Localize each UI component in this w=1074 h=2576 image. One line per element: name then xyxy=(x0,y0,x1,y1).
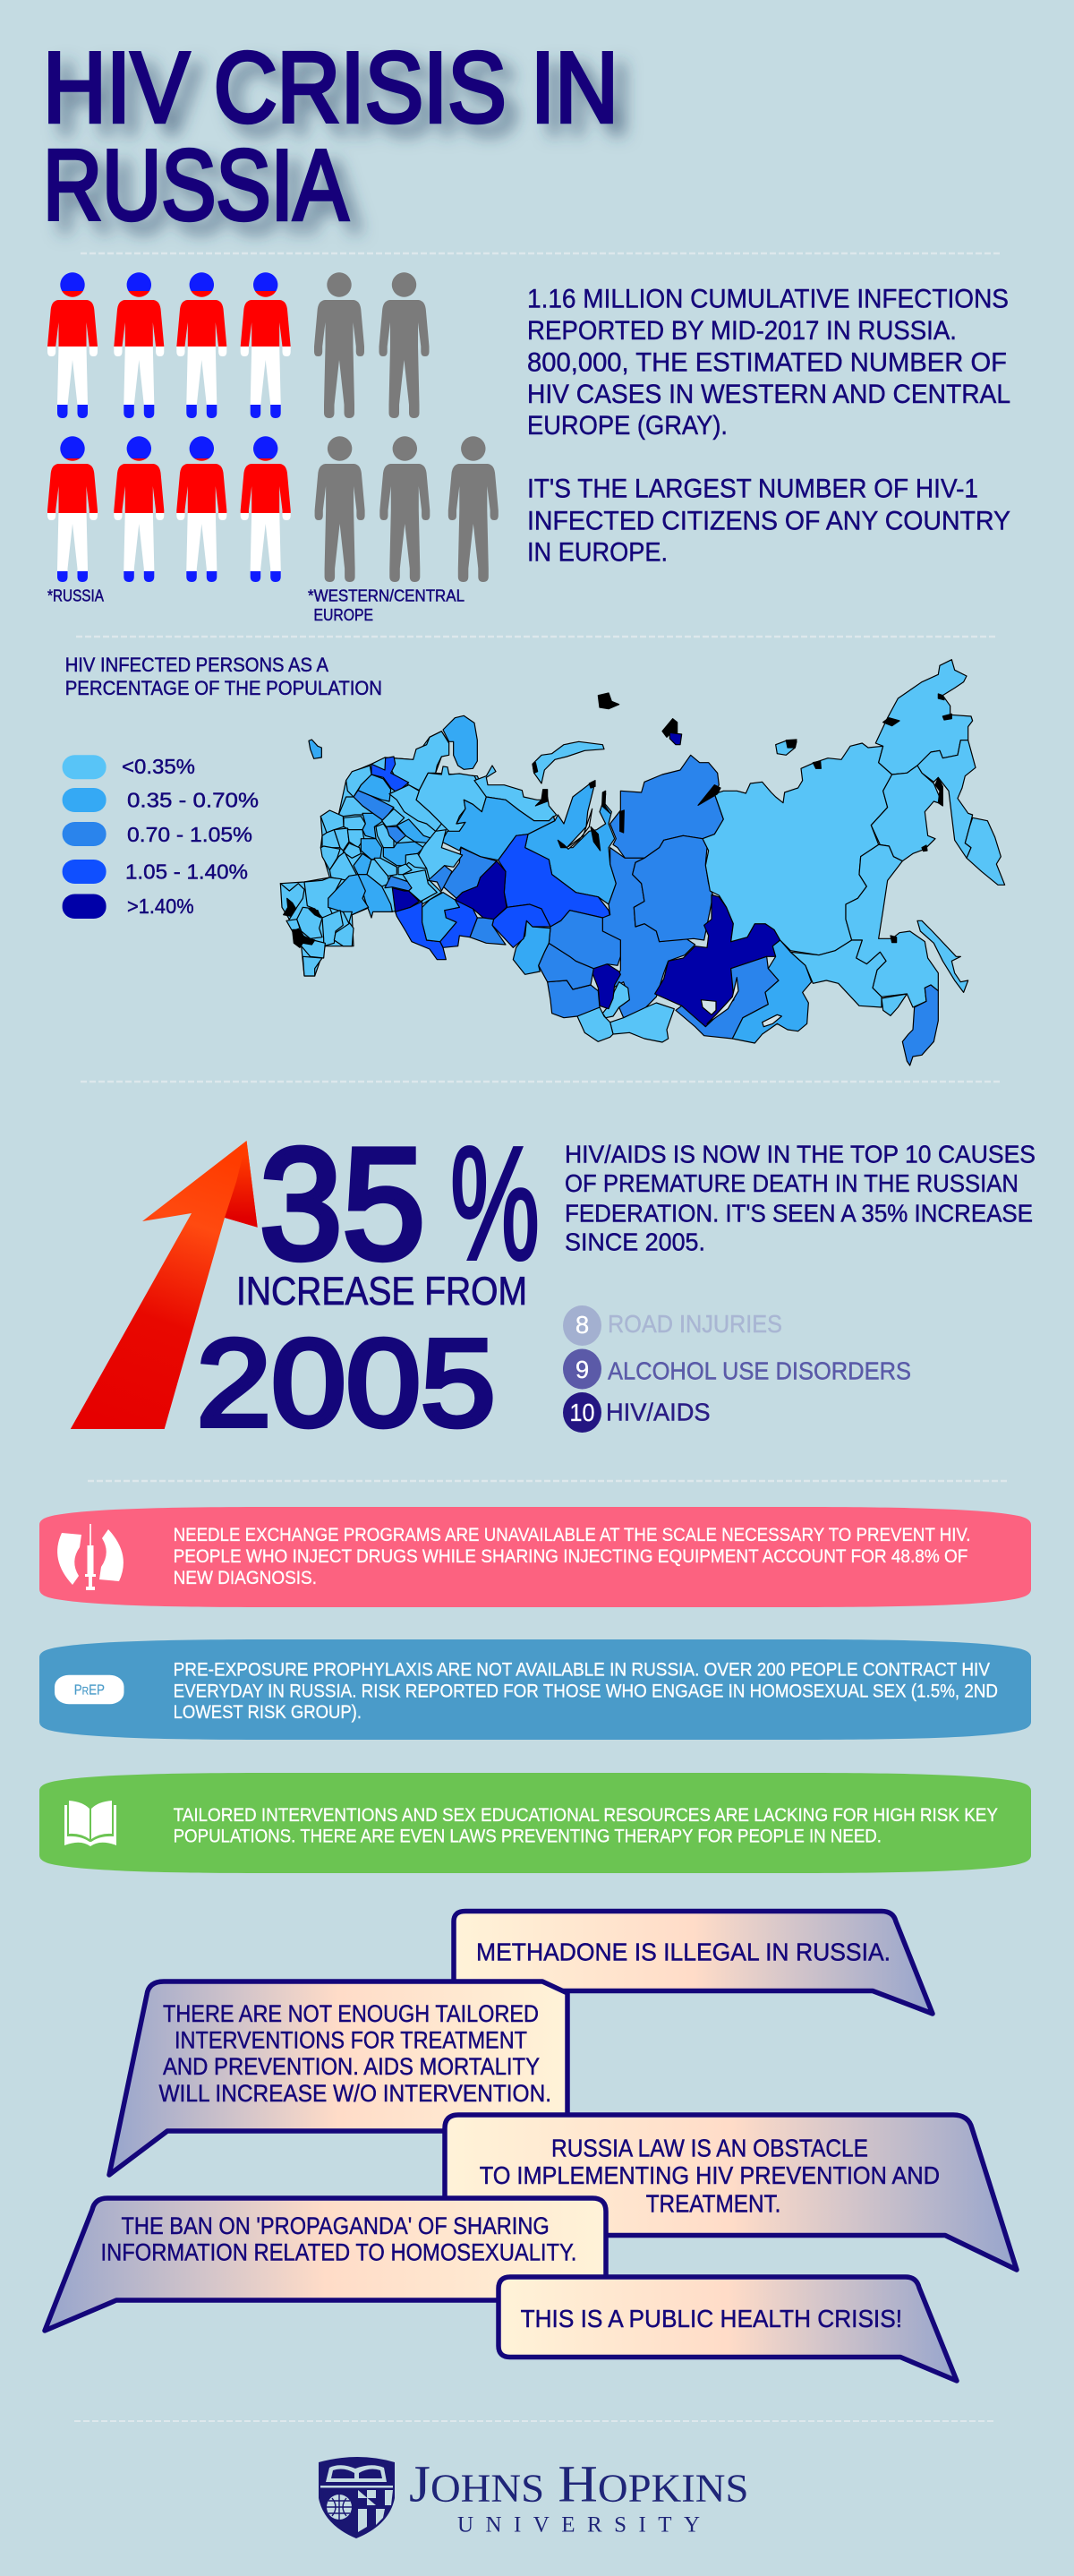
text block: infection statistics: 1.16 MILLION CUMULATIVE INFECTIONS xyxy=(527,284,1009,313)
speech bubble: Russian law: RUSSIA LAW IS AN OBSTACLE xyxy=(551,2134,868,2161)
ranking list: causes 8 to 10: 10 xyxy=(569,1399,594,1426)
text block: premature death ranking: FEDERATION. IT'S SEEN A 35% INCREASE xyxy=(565,1199,1033,1227)
icon: university shield xyxy=(319,2457,395,2538)
title: HIV CRISIS IN xyxy=(43,32,618,143)
map legend: 0.70 - 1.05% xyxy=(127,823,252,846)
text block: premature death ranking xyxy=(565,1140,1036,1256)
speech bubble: public health crisis: THIS IS A PUBLIC HEALTH CRISIS! xyxy=(521,2305,902,2332)
ranking list: causes 8 to 10: 8 xyxy=(575,1311,589,1339)
text block: infection statistics: IT'S THE LARGEST NUMBER OF HIV-1 xyxy=(527,475,978,504)
text block: infection statistics: 800,000, THE ESTIMATED NUMBER OF xyxy=(527,348,1007,378)
heading: map title: HIV INFECTED PERSONS AS A xyxy=(65,654,328,676)
text block: infection statistics: REPORTED BY MID-2017 IN RUSSIA. xyxy=(527,316,957,346)
icon: PrEP pill: PREP xyxy=(74,1683,105,1699)
pictogram label: Western/Central Europe: EUROPE xyxy=(313,606,373,624)
map legend: 0.35 - 0.70% xyxy=(127,789,259,812)
text block: infection statistics: INFECTED CITIZENS OF ANY COUNTRY xyxy=(527,506,1010,535)
ranking list: causes 8 to 10 xyxy=(563,1305,911,1433)
heading: map title xyxy=(65,654,382,699)
icon: syringe with exchange arrows xyxy=(57,1524,124,1590)
speech bubble: Russian law: TREATMENT. xyxy=(646,2190,780,2218)
title: RUSSIA xyxy=(43,130,348,241)
icon: PrEP pill xyxy=(55,1675,124,1704)
title xyxy=(43,32,618,241)
text: tailored interventions details: POPULATIONS. THERE ARE EVEN LAWS PREVENTING THERAPY FOR PEOPLE IN NEED. xyxy=(174,1827,882,1847)
big number: 2005: 2005 xyxy=(197,1314,496,1452)
speech bubble: tailored interventions: AND PREVENTION. AIDS MORTALITY xyxy=(163,2053,540,2080)
big number: 35% xyxy=(260,1114,540,1294)
speech bubble: tailored interventions xyxy=(109,1981,567,2175)
wordmark xyxy=(409,2455,748,2537)
speech bubble: tailored interventions: INTERVENTIONS FOR TREATMENT xyxy=(175,2027,527,2054)
text: PrEP details: EVERYDAY IN RUSSIA. RISK REPORTED FOR THOSE WHO ENGAGE IN HOMOSEXUAL SEX (1.5%, 2ND xyxy=(174,1681,998,1701)
text: PrEP details: LOWEST RISK GROUP). xyxy=(174,1702,362,1723)
logo: Johns Hopkins University xyxy=(319,2455,748,2538)
pictogram label: Western/Central Europe xyxy=(308,587,465,624)
text: PrEP details xyxy=(174,1660,998,1723)
speech bubble: tailored interventions: THERE ARE NOT ENOUGH TAILORED xyxy=(163,2000,539,2027)
speech bubble: Russian law xyxy=(445,2115,1017,2270)
text: needle exchange details xyxy=(174,1525,970,1588)
panel: tailored interventions xyxy=(39,1773,1031,1873)
text block: infection statistics: EUROPE (GRAY). xyxy=(527,411,728,441)
text: PrEP details: PRE-EXPOSURE PROPHYLAXIS ARE NOT AVAILABLE IN RUSSIA. OVER 200 PEOPLE CONTRACT HIV xyxy=(174,1660,990,1681)
speech bubble: propaganda ban: THE BAN ON 'PROPAGANDA' OF SHARING xyxy=(122,2212,550,2239)
text: tailored interventions details: TAILORED INTERVENTIONS AND SEX EDUCATIONAL RESOURCES ARE LACKING FOR HIGH RISK KEY xyxy=(174,1805,998,1826)
speech bubble: tailored interventions: WILL INCREASE W/O INTERVENTION. xyxy=(159,2080,551,2107)
text block: premature death ranking: SINCE 2005. xyxy=(565,1228,705,1256)
ranking list: causes 8 to 10: ROAD INJURIES xyxy=(608,1310,782,1338)
text block: infection statistics: HIV CASES IN WESTERN AND CENTRAL xyxy=(527,380,1010,409)
big number: 35%: % xyxy=(450,1114,540,1294)
text block: infection statistics xyxy=(527,284,1010,568)
icon: open book xyxy=(64,1801,116,1846)
speech bubble: methadone xyxy=(454,1911,933,2014)
ranking list: causes 8 to 10: ALCOHOL USE DISORDERS xyxy=(608,1357,911,1385)
text block: premature death ranking: OF PREMATURE DEATH IN THE RUSSIAN xyxy=(565,1169,1019,1197)
wordmark: JOHNS HOPKINS xyxy=(409,2455,748,2512)
panel: pre-exposure prophylaxis xyxy=(39,1639,1031,1740)
arrow: rising trend xyxy=(71,1141,258,1429)
text block: premature death ranking: HIV/AIDS IS NOW IN THE TOP 10 CAUSES xyxy=(565,1140,1036,1168)
speech bubble: methadone: METHADONE IS ILLEGAL IN RUSSIA. xyxy=(476,1938,891,1965)
heading: map title: PERCENTAGE OF THE POPULATION xyxy=(65,677,382,699)
choropleth map of Russia xyxy=(280,660,1005,1065)
panel: needle exchange xyxy=(39,1507,1031,1607)
pictogram: Western and Central Europe figures in gray xyxy=(314,272,499,582)
pictogram: Russia figures in flag colours xyxy=(47,272,291,582)
ranking list: causes 8 to 10: HIV/AIDS xyxy=(606,1399,711,1426)
wordmark: UNIVERSITY xyxy=(457,2513,700,2537)
speech bubble: public health crisis xyxy=(499,2277,957,2381)
text block: infection statistics: IN EUROPE. xyxy=(527,538,668,568)
map legend: >1.40% xyxy=(127,894,194,918)
caption: increase from: INCREASE FROM xyxy=(236,1270,527,1314)
text: needle exchange details: NEW DIAGNOSIS. xyxy=(174,1568,317,1588)
big number: 35%: 35 xyxy=(260,1117,425,1292)
map legend: 1.05 - 1.40% xyxy=(125,860,248,884)
speech bubble: propaganda ban xyxy=(45,2198,606,2331)
text: needle exchange details: PEOPLE WHO INJECT DRUGS WHILE SHARING INJECTING EQUIPMENT ACCOUNT FOR 48.8% OF xyxy=(174,1546,967,1567)
text: tailored interventions details xyxy=(174,1805,998,1847)
speech bubble: Russian law: TO IMPLEMENTING HIV PREVENTION AND xyxy=(480,2161,940,2189)
pictogram label: Western/Central Europe: *WESTERN/CENTRAL xyxy=(308,587,465,605)
pictogram label: Russia: *RUSSIA xyxy=(47,587,104,605)
speech bubble: propaganda ban: INFORMATION RELATED TO HOMOSEXUALITY. xyxy=(100,2238,576,2265)
ranking list: causes 8 to 10: 9 xyxy=(575,1356,589,1383)
map legend xyxy=(63,755,259,919)
map legend: <0.35% xyxy=(122,755,195,778)
text: needle exchange details: NEEDLE EXCHANGE PROGRAMS ARE UNAVAILABLE AT THE SCALE NECESSARY TO PREVENT HIV. xyxy=(174,1525,970,1545)
